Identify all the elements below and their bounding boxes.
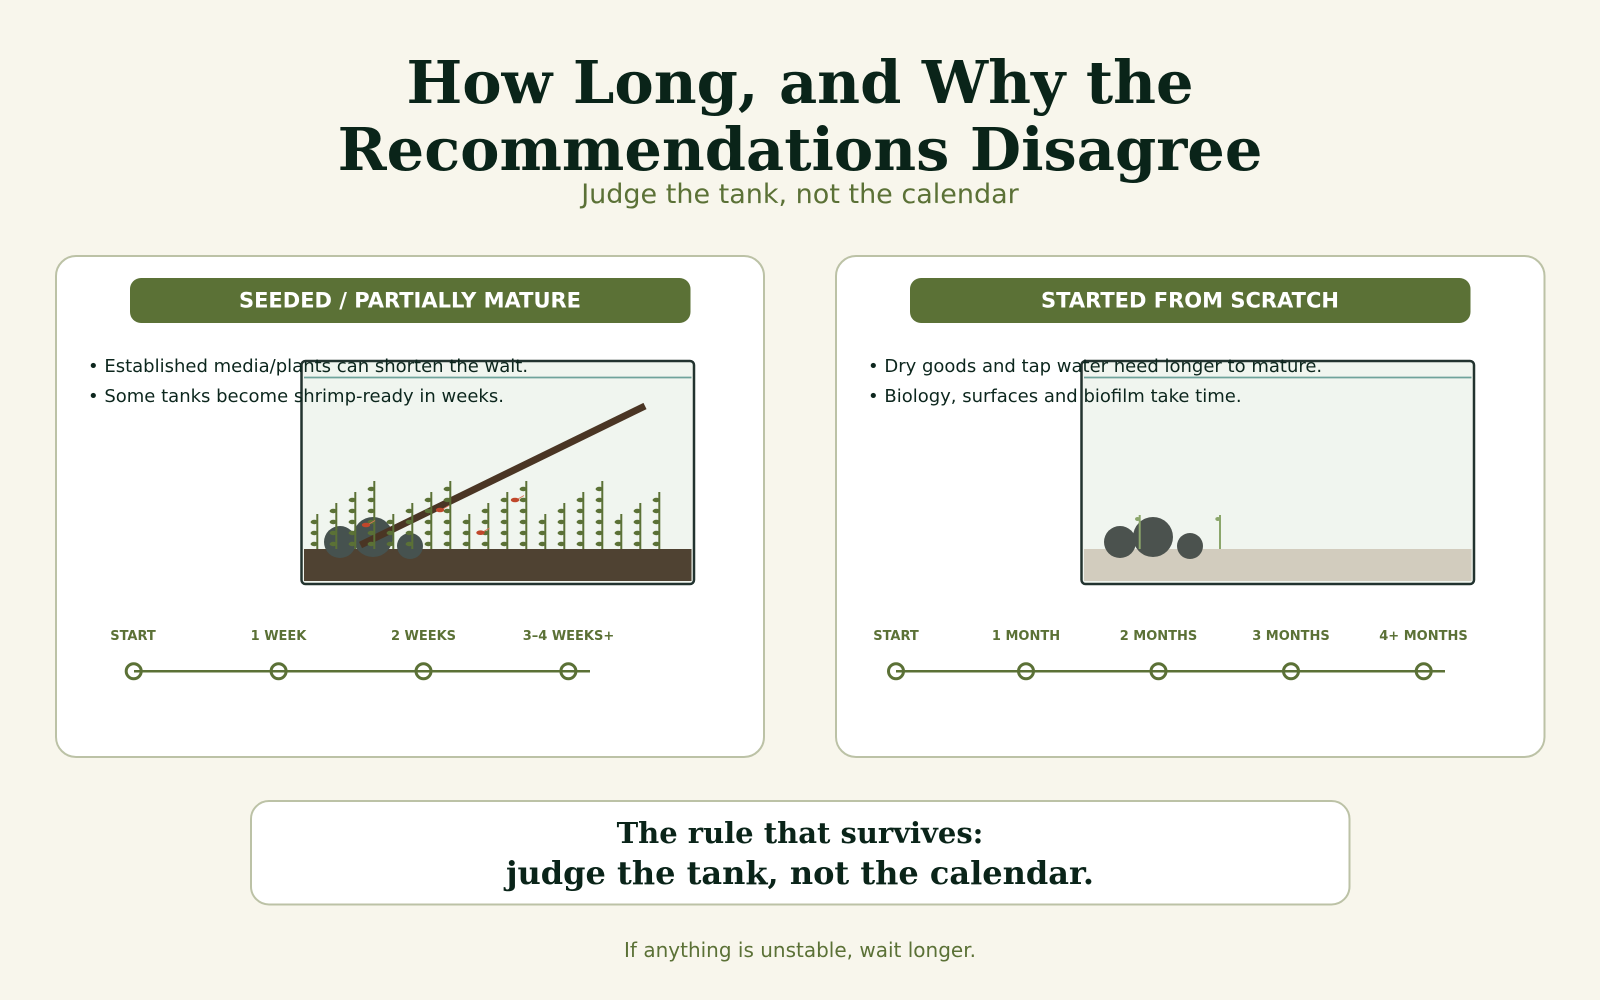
timeline: weeks: START <box>110 629 156 644</box>
panel: started from scratch <box>836 256 1544 757</box>
timeline: months: 3 MONTHS <box>1252 629 1330 644</box>
title <box>338 48 1262 184</box>
panel: seeded / partially mature <box>56 256 764 757</box>
timeline: months: 1 MONTH <box>992 629 1060 644</box>
heading pill: scratch <box>910 278 1470 323</box>
footer note: If anything is unstable, wait longer. <box>624 938 976 962</box>
callout: the rule that survives <box>251 801 1350 904</box>
title: Recommendations Disagree <box>338 115 1262 184</box>
bullet list: scratch <box>868 356 1322 407</box>
title: How Long, and Why the <box>406 48 1194 117</box>
timeline: months: 4+ MONTHS <box>1379 629 1468 644</box>
heading pill: seeded: SEEDED / PARTIALLY MATURE <box>239 288 581 312</box>
heading pill: seeded <box>130 278 690 323</box>
callout: the rule that survives: judge the tank, not the calendar. <box>503 854 1094 892</box>
tank illustration: mature planted tank <box>302 361 694 584</box>
timeline: months: 2 MONTHS <box>1120 629 1197 644</box>
timeline: weeks <box>110 629 614 679</box>
bullet list: seeded: • Established media/plants can shorten the wait. <box>88 356 528 377</box>
bullet list: seeded <box>88 356 528 407</box>
timeline: months: START <box>873 629 919 644</box>
timeline: weeks: 3–4 WEEKS+ <box>523 629 614 644</box>
callout: the rule that survives: The rule that survives: <box>617 816 983 850</box>
timeline: months <box>873 629 1468 679</box>
bullet list: seeded: • Some tanks become shrimp-ready in weeks. <box>88 386 504 407</box>
subtitle: Judge the tank, not the calendar <box>579 179 1020 210</box>
timeline: weeks: 2 WEEKS <box>391 629 456 644</box>
timeline: weeks: 1 WEEK <box>251 629 307 644</box>
panel background <box>56 256 764 757</box>
bullet list: scratch: • Dry goods and tap water need longer to mature. <box>868 356 1322 377</box>
bullet list: scratch: • Biology, surfaces and biofilm take time. <box>868 386 1242 407</box>
panel background <box>836 256 1544 757</box>
heading pill: scratch: STARTED FROM SCRATCH <box>1041 288 1339 312</box>
tank illustration: new bare tank <box>1082 361 1474 584</box>
